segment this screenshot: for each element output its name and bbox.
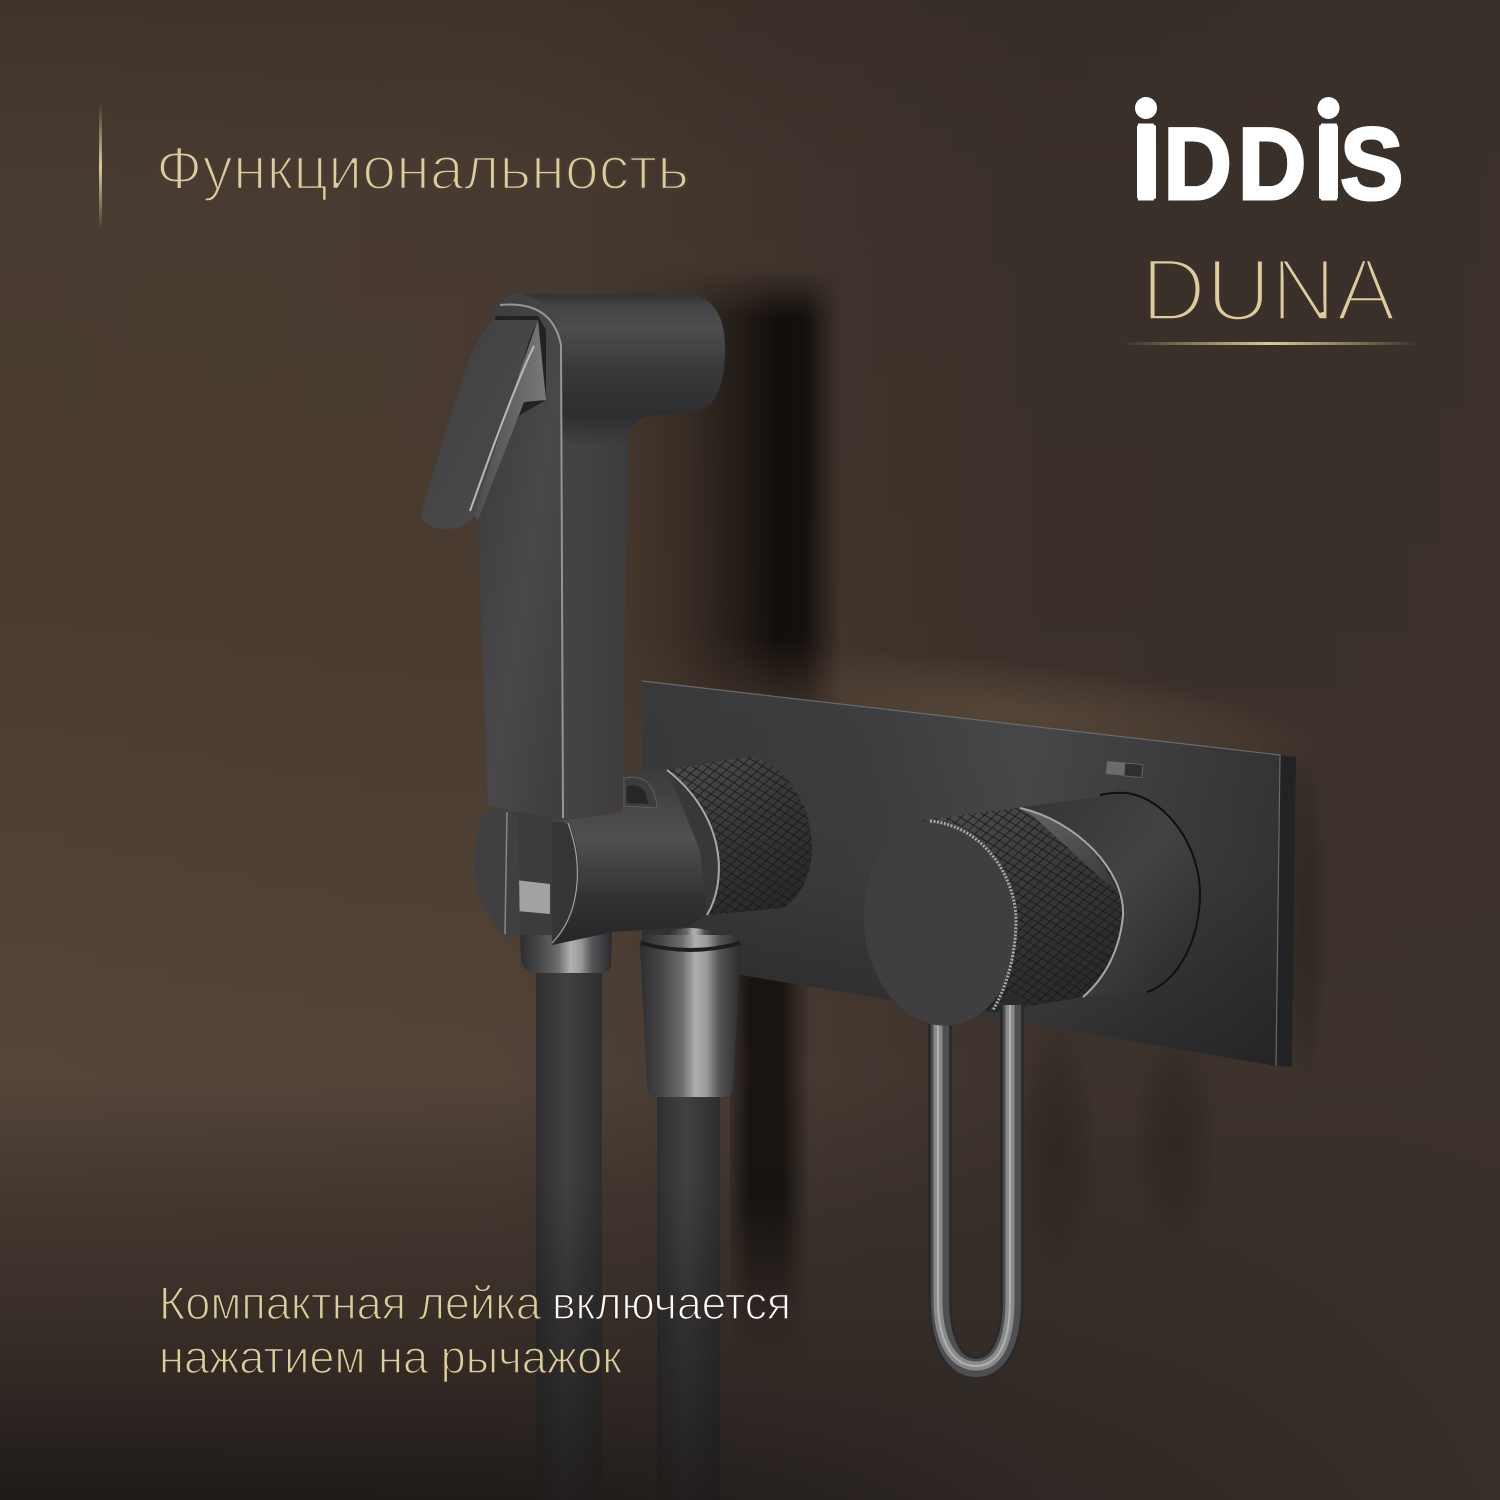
hose connector (640, 928, 741, 1097)
caption: Компактная лейка (159, 1277, 541, 1329)
hand shower body (421, 293, 725, 819)
lever loop (938, 1005, 1012, 1368)
holder pivot (474, 810, 552, 936)
holder elbow with knurled collar (550, 757, 812, 945)
product: bidet faucet (421, 293, 1296, 1500)
collection name: DUNA (1141, 240, 1397, 340)
caption (159, 1277, 791, 1383)
brand logo: iDDiS (1133, 107, 1403, 221)
gold divider (1122, 342, 1418, 345)
trigger lever (421, 320, 546, 529)
caption: нажатием на рычажок (159, 1331, 623, 1383)
wall plate (642, 681, 1296, 1067)
right hose (657, 1090, 720, 1500)
temperature knob (854, 808, 1123, 1368)
left hose (520, 930, 612, 1500)
section marker line (99, 104, 102, 230)
indicator mark (1106, 761, 1143, 778)
caption: включается (552, 1277, 791, 1329)
heading: Функциональность (156, 135, 689, 202)
rear cylinder (1017, 793, 1200, 997)
